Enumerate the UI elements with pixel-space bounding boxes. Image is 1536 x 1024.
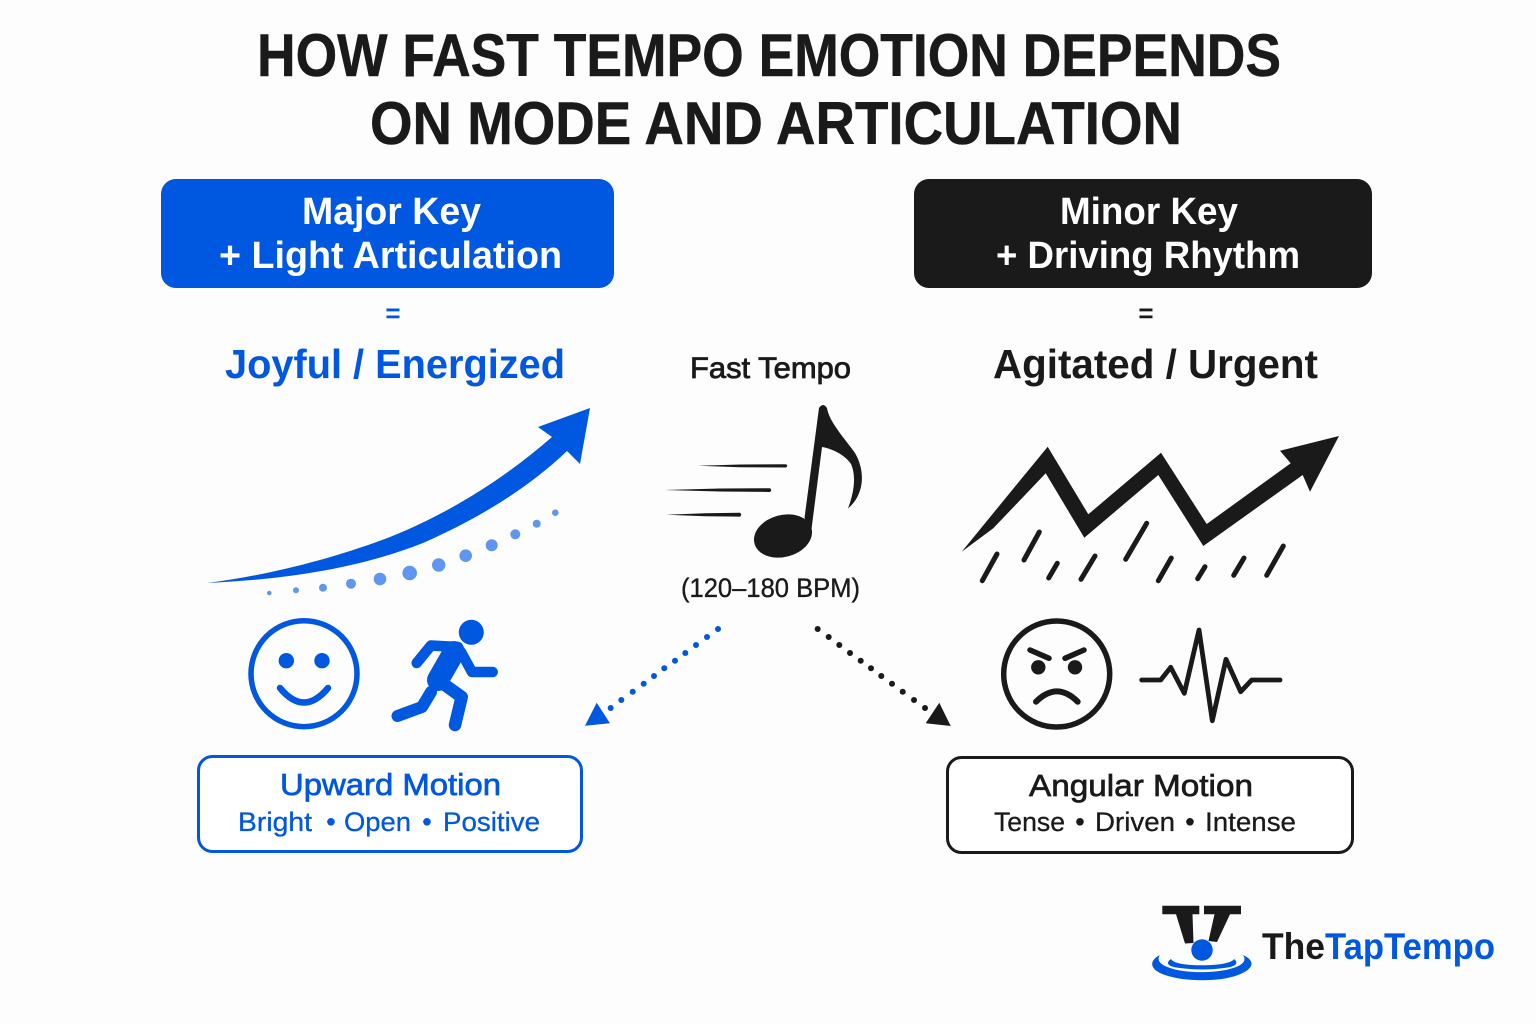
arrow: dotted black to minor outcome (815, 626, 951, 726)
panel: upward motion (198, 756, 582, 852)
equals sign: minor: = (1138, 298, 1154, 328)
logo: the tap tempo (1152, 906, 1495, 980)
panel: upward motion: • (326, 807, 336, 837)
icon: jagged rising arrow (962, 436, 1339, 552)
panel: angular motion: Tense (994, 807, 1065, 837)
panel: angular motion: • (1185, 807, 1195, 837)
heading: agitated urgent: Agitated / Urgent (993, 341, 1318, 387)
panel: minor key header: Minor Key (1060, 191, 1238, 233)
icon: speed lines (664, 464, 787, 517)
panel: major key header (161, 179, 614, 288)
panel: minor key header (914, 179, 1372, 288)
icon: music note (749, 405, 862, 564)
icon: rising curved arrow (207, 408, 590, 583)
panel: major key header: Major Key (302, 191, 481, 233)
equals sign: major: = (385, 298, 401, 328)
panel: angular motion: • (1075, 807, 1085, 837)
panel: upward motion: Positive (443, 807, 540, 837)
icon: smiling face (251, 621, 357, 727)
icon: running figure (398, 620, 493, 725)
logo: the tap tempo: The (1262, 926, 1325, 967)
panel: major key header: + Light Articulation (219, 235, 562, 277)
arrow: dotted blue to major outcome (585, 626, 721, 726)
panel: angular motion (948, 758, 1352, 852)
icon: angry face (1004, 621, 1110, 727)
panel: upward motion: Upward Motion (280, 767, 501, 802)
icon: pulse waveform (1142, 630, 1280, 721)
dotted trail under rising arrow (267, 509, 559, 595)
panel: angular motion: Angular Motion (1029, 768, 1253, 803)
title: ON MODE AND ARTICULATION (370, 90, 1182, 157)
panel: upward motion: Open (344, 807, 411, 837)
panel: angular motion: Driven (1095, 807, 1175, 837)
panel: minor key header: + Driving Rhythm (996, 235, 1300, 277)
label: bpm range: (120–180 BPM) (681, 573, 860, 603)
panel: upward motion: • (422, 807, 432, 837)
panel: angular motion: Intense (1205, 807, 1296, 837)
logo: the tap tempo: TapTempo (1325, 926, 1495, 967)
heading: joyful energized: Joyful / Energized (225, 341, 565, 387)
rain-like dashes under jagged arrow (982, 523, 1283, 581)
title (257, 22, 1281, 157)
label: fast tempo: Fast Tempo (690, 352, 851, 385)
panel: upward motion: Bright (238, 807, 313, 837)
title: HOW FAST TEMPO EMOTION DEPENDS (257, 22, 1281, 89)
